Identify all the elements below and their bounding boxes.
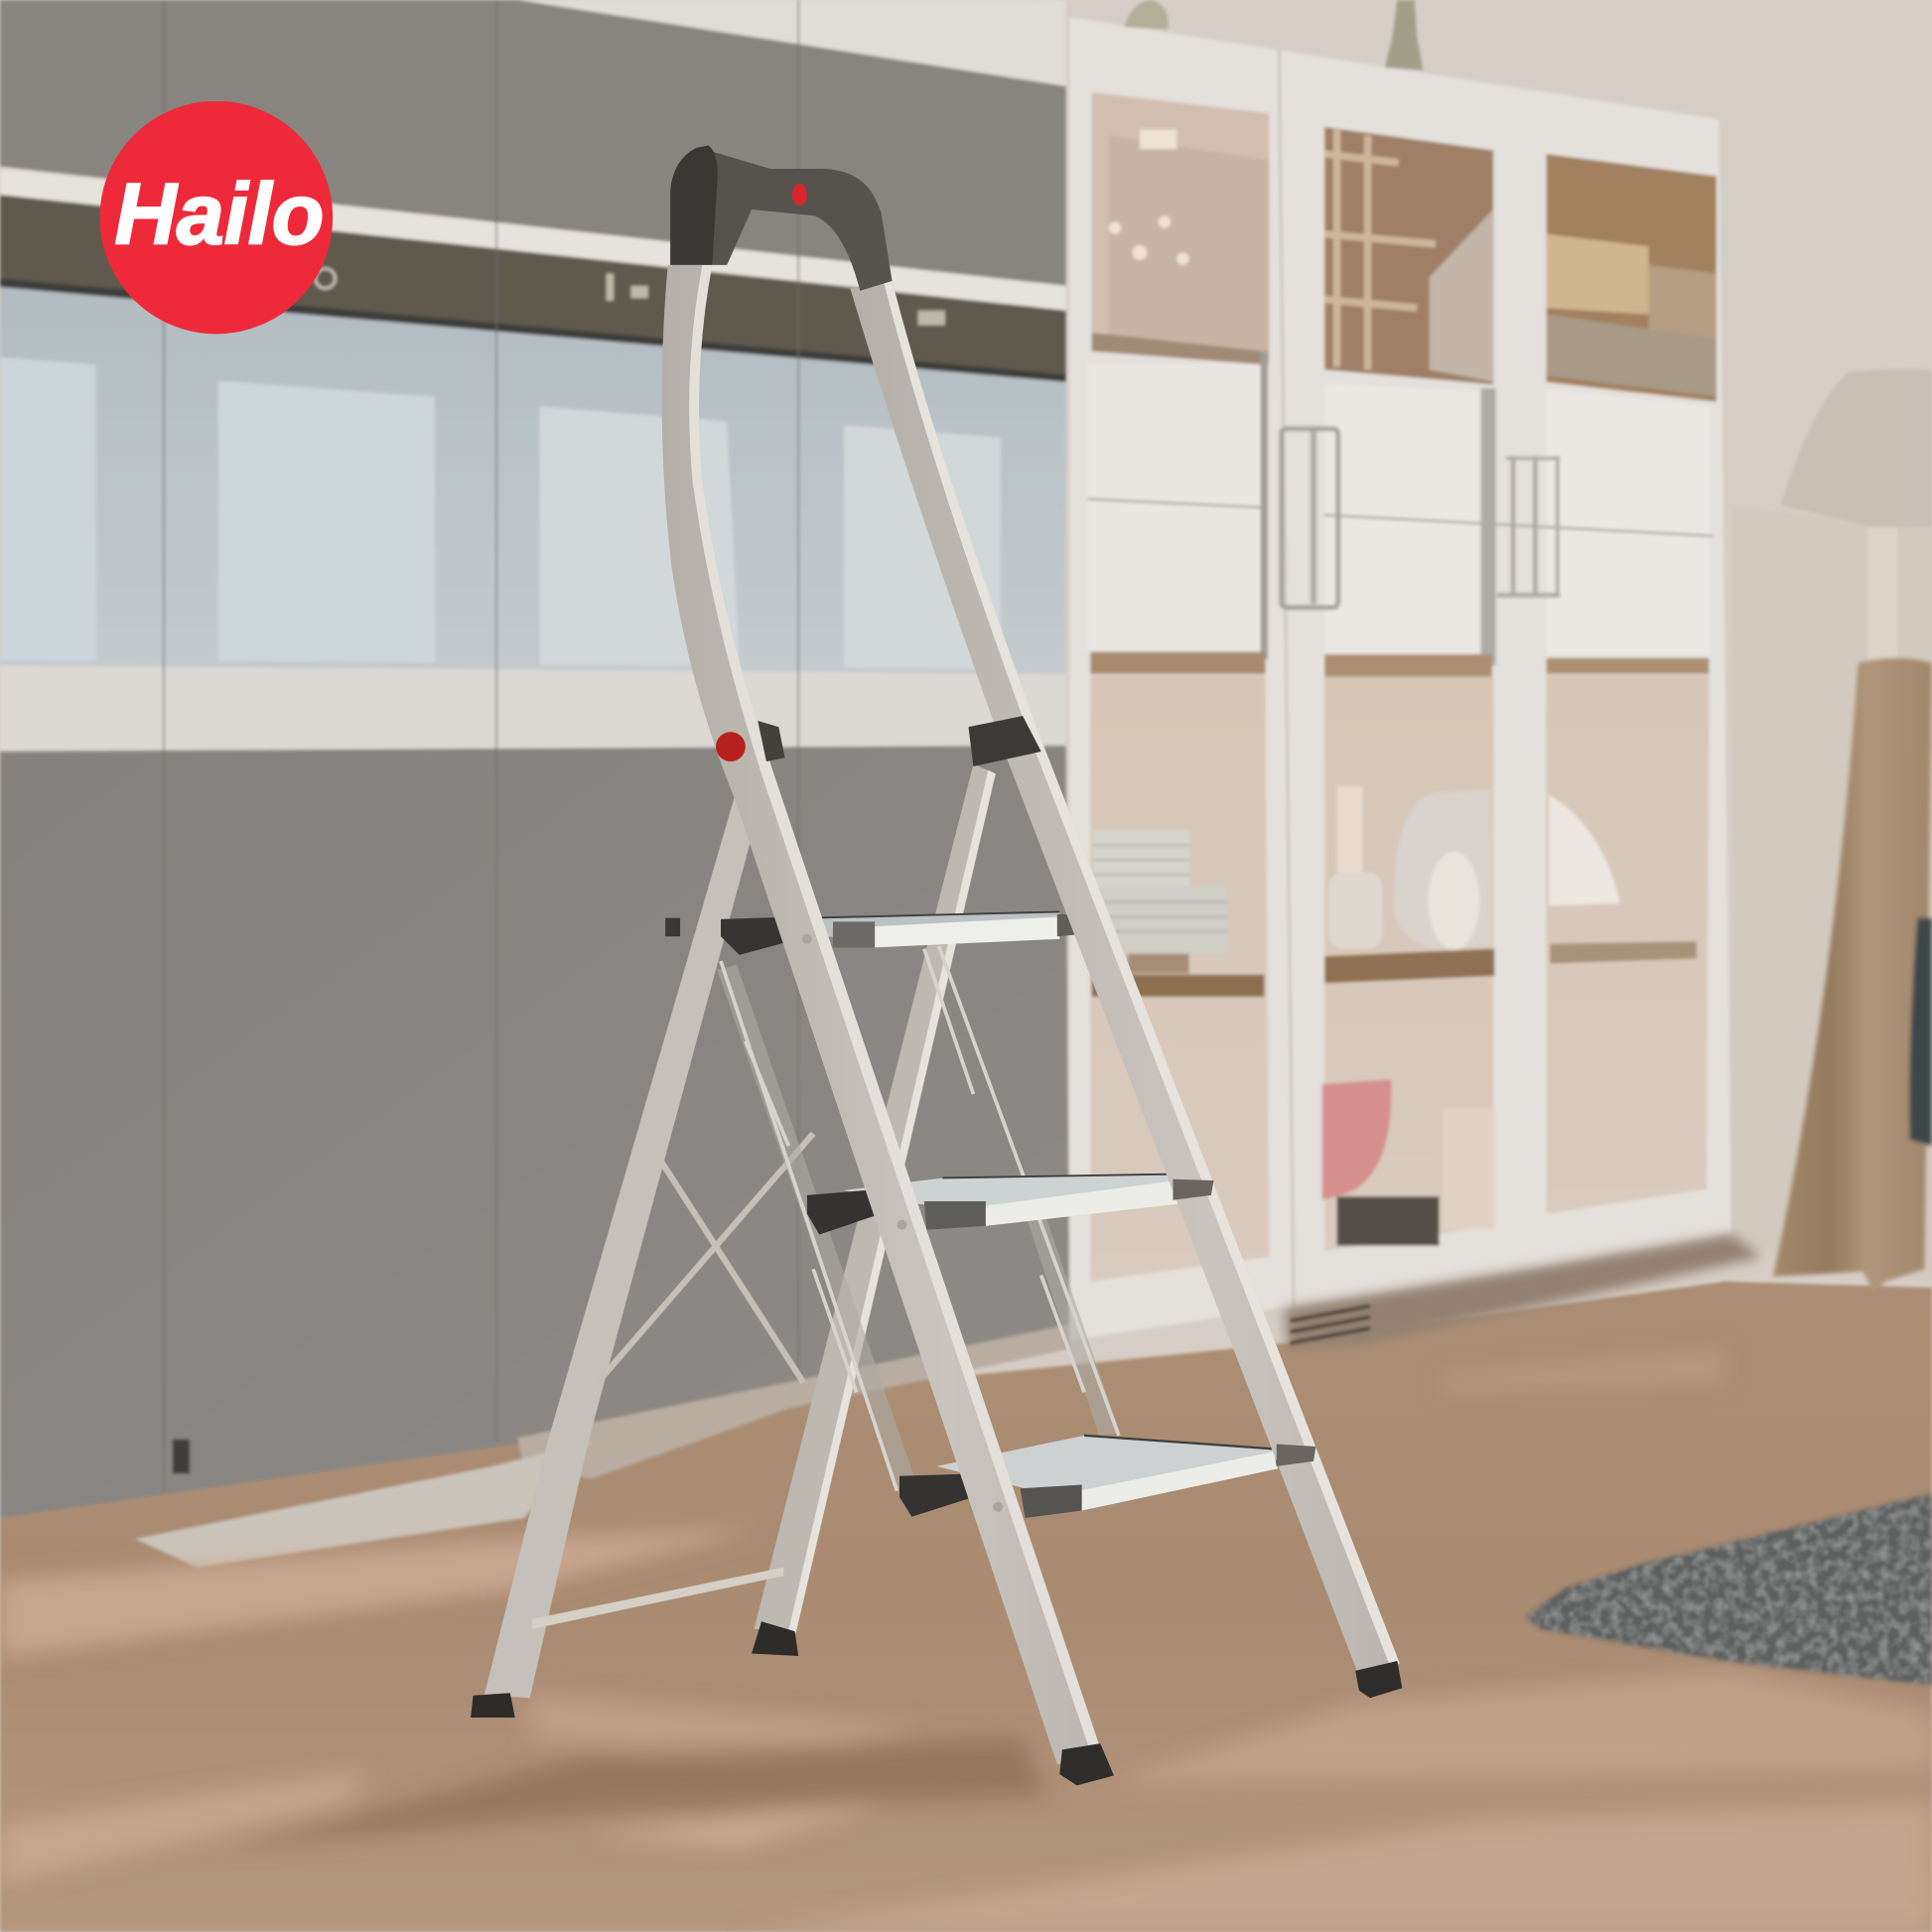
handle arm — [712, 152, 893, 291]
front rails — [662, 265, 1400, 1764]
floor light and shadow — [0, 1349, 1932, 1932]
oven display details — [316, 269, 945, 326]
vases on cabinet — [1124, 0, 1423, 70]
wooden floor — [0, 1282, 1932, 1932]
rail collars on steps — [1173, 1179, 1315, 1466]
front feet — [1059, 1661, 1402, 1785]
shadow under cabinet — [1284, 1235, 1762, 1349]
glass cabinet — [1069, 17, 1731, 1340]
handle end cap — [670, 145, 718, 265]
step bracket — [968, 716, 1041, 766]
rear legs and braces — [484, 763, 1120, 1698]
kitchen units — [0, 0, 1069, 1524]
Hailo logo — [100, 101, 333, 334]
step ladder — [471, 145, 1402, 1785]
floor lamp — [1780, 368, 1932, 675]
step 1 — [665, 911, 1097, 955]
base slab on floor — [136, 1442, 592, 1568]
rug — [1525, 1493, 1932, 1686]
back wall — [0, 0, 1932, 1355]
vent below cabinet — [1290, 1307, 1370, 1343]
curtain and chair — [1773, 658, 1932, 1294]
step 3 — [899, 1436, 1315, 1518]
logo circle — [100, 101, 333, 334]
top handle — [670, 145, 893, 291]
handle red button — [792, 184, 807, 206]
step 2 — [807, 1174, 1213, 1235]
side hinge — [758, 721, 785, 761]
rear feet — [471, 1621, 798, 1718]
logo wordmark: Hailo — [114, 167, 324, 263]
red locking knob — [716, 732, 746, 761]
wall panel beneath lamp — [1731, 505, 1932, 1282]
kitchen base band — [517, 1324, 1069, 1478]
